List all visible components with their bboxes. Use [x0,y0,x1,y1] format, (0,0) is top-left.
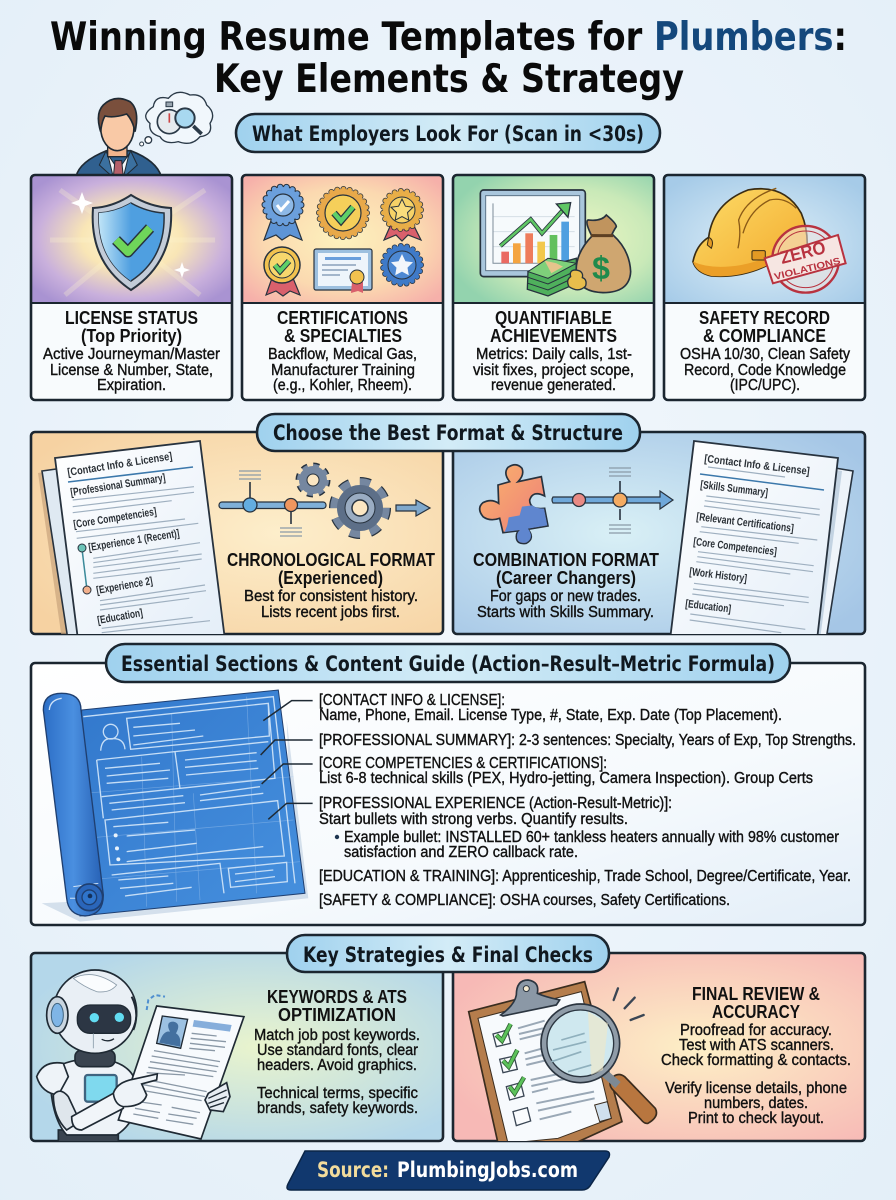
section heading: key strategies [287,935,609,972]
panel: final review [453,953,865,1143]
icon: resume document: [Core Competencies] [73,506,158,531]
icon: chart, cash and money bag [480,190,631,296]
panel text: FINAL REVIEW & [692,983,820,1004]
panel text: KEYWORDS & ATS [267,986,407,1007]
format text: (Career Changers) [496,567,636,588]
icon: resume document: [Education] [96,607,144,627]
panel text: Proofread for accuracy. [680,1022,832,1039]
icon: badges and certificate [264,187,421,296]
card text [680,307,850,394]
card text: (IPC/UPC). [730,377,800,394]
icon: timeline with gears [219,468,430,536]
section guide text: satisfaction and ZERO callback rate. [344,844,578,861]
stamp text [773,237,842,283]
card text: revenue generated. [491,377,616,394]
section guide text: [CORE COMPETENCIES & CERTIFICATIONS]: [319,755,607,772]
stamp text: ZERO [778,237,828,268]
section guide text: Name, Phone, Email. License Type, #, State, Exp. Date (Top Placement). [319,707,782,724]
card text: OSHA 10/30, Clean Safety [680,346,850,363]
panel text [661,983,851,1127]
card text [43,307,220,394]
card text: Active Journeyman/Master [43,346,220,363]
card text: Metrics: Daily calls, 1st- [476,346,632,363]
section guide text: [PROFESSIONAL EXPERIENCE (Action-Result-Metric)]: [319,795,672,812]
panel text: Print to check layout. [688,1110,824,1127]
section heading: what employers look for [236,114,660,152]
card text: & COMPLIANCE [703,325,826,346]
card text: License & Number, State, [50,362,213,379]
icon: dollar sign: $ [592,250,610,286]
format text: Lists recent jobs first. [261,604,400,621]
section heading: what employers look for: What Employers Look For (Scan in <30s) [252,122,644,146]
icon: robot holding resume [37,970,244,1143]
format text: Best for consistent history. [244,588,418,605]
icon: timeline arrow [552,468,673,533]
icon: clipboard and magnifying glass [469,980,656,1143]
card text: Backflow, Medical Gas, [268,346,417,363]
icon: blueprint roll [42,690,308,922]
icon: resume document: [Core Competencies] [693,536,778,558]
section heading: choose the best format: Choose the Best Format & Structure [273,421,623,445]
card: certifications [242,175,443,400]
icon: resume document: [Relevant Certifications] [696,511,795,535]
section guide text [319,692,856,909]
icon: resume document: [Professional Summary] [70,472,167,499]
card: safety record [664,175,865,400]
format text [227,549,436,621]
section heading: choose the best format [257,414,640,451]
panel: essential sections [31,663,865,925]
panel text: Use standard fonts, clear [257,1042,418,1059]
section heading: key strategies: Key Strategies & Final Checks [303,943,593,967]
icon: shield with check [71,192,190,290]
stamp text: VIOLATIONS [773,256,842,283]
format text: COMBINATION FORMAT [473,549,660,570]
panel text: Verify license details, phone [665,1080,847,1097]
icon: puzzle piece [480,465,548,544]
title [50,15,847,102]
section guide text: [PROFESSIONAL SUMMARY]: 2-3 sentences: Specialty, Years of Exp, Top Strengths. [319,732,856,749]
panel text: brands, safety keywords. [257,1100,418,1117]
panel text: Technical terms, specific [257,1085,418,1102]
card text: CERTIFICATIONS [277,307,408,328]
icon: employer with thought bubble [76,92,213,177]
panel: chronological format [31,432,443,640]
card text [268,307,417,394]
section heading: essential sections [106,644,790,682]
panel: combination format [453,432,865,640]
panel: keywords and ATS [31,953,443,1143]
section guide text: [CONTACT INFO & LICENSE]: [319,692,505,709]
icon: resume document: [Contact Info & License] [67,450,173,479]
panel text: Test with ATS scanners. [679,1037,834,1054]
section guide text: Start bullets with strong verbs. Quantify results. [319,811,628,828]
card text: (e.g., Kohler, Rheem). [273,377,412,394]
icon: resume document [38,441,225,640]
format text [473,549,660,621]
icon: resume document: [Experience 2] [95,575,154,597]
card: quantifiable achievements [453,175,654,400]
icon: resume document: [Skills Summary] [700,479,769,499]
card text: (Top Priority) [81,325,182,346]
source banner: PlumbingJobs.com [397,1158,578,1182]
card text: visit fixes, project scope, [473,362,634,379]
card text: Record, Code Knowledge [684,362,846,379]
card text: Manufacturer Training [271,362,415,379]
icon: resume document: [Contact Info & License] [704,453,811,478]
card text: & SPECIALTIES [284,325,402,346]
panel text: Match job post keywords. [254,1027,420,1044]
panel text [254,986,420,1117]
card text [473,307,634,394]
panel text: OPTIMIZATION [278,1004,396,1025]
section guide text: List 6-8 technical skills (PEX, Hydro-jetting, Camera Inspection). Group Certs [319,770,813,787]
card text: LICENSE STATUS [65,307,198,328]
icon: hard hat with stamp [693,188,846,293]
panel text: Check formatting & contacts. [661,1052,851,1069]
card text: Expiration. [97,377,166,394]
panel text: headers. Avoid graphics. [257,1057,417,1074]
card text: ACHIEVEMENTS [490,325,617,346]
title: Key Elements & Strategy [214,57,684,102]
source banner: Source: [317,1158,389,1182]
icon: resume document: [Experience 1 (Recent)] [88,528,181,554]
section heading: essential sections: Essential Sections & Content Guide (Action–Result–Metric Formula) [121,652,775,676]
section guide text: [EDUCATION & TRAINING]: Apprenticeship, Trade School, Degree/Certificate, Year. [319,868,851,885]
panel text: ACCURACY [712,1001,801,1022]
icon: leader lines [261,701,313,819]
icon: resume document [670,441,853,640]
icon: glow rays [50,190,215,295]
format text: CHRONOLOGICAL FORMAT [227,549,436,570]
format text: Starts with Skills Summary. [477,604,654,621]
format text: For gaps or new trades. [490,588,641,605]
format text: (Experienced) [278,567,383,588]
title: Winning Resume Templates for Plumbers: [50,15,847,60]
section guide text: [SAFETY & COMPLIANCE]: OSHA courses, Safety Certifications. [319,892,730,909]
icon: resume document: [Education] [685,598,732,616]
source banner [287,1151,610,1190]
panel text: numbers, dates. [704,1095,808,1112]
section guide text: Example bullet: INSTALLED 60+ tankless heaters annually with 98% customer [344,829,839,846]
icon: resume document: [Work History] [689,566,748,585]
card text: SAFETY RECORD [699,307,830,328]
card: license status [31,175,232,400]
card text: QUANTIFIABLE [495,307,612,328]
